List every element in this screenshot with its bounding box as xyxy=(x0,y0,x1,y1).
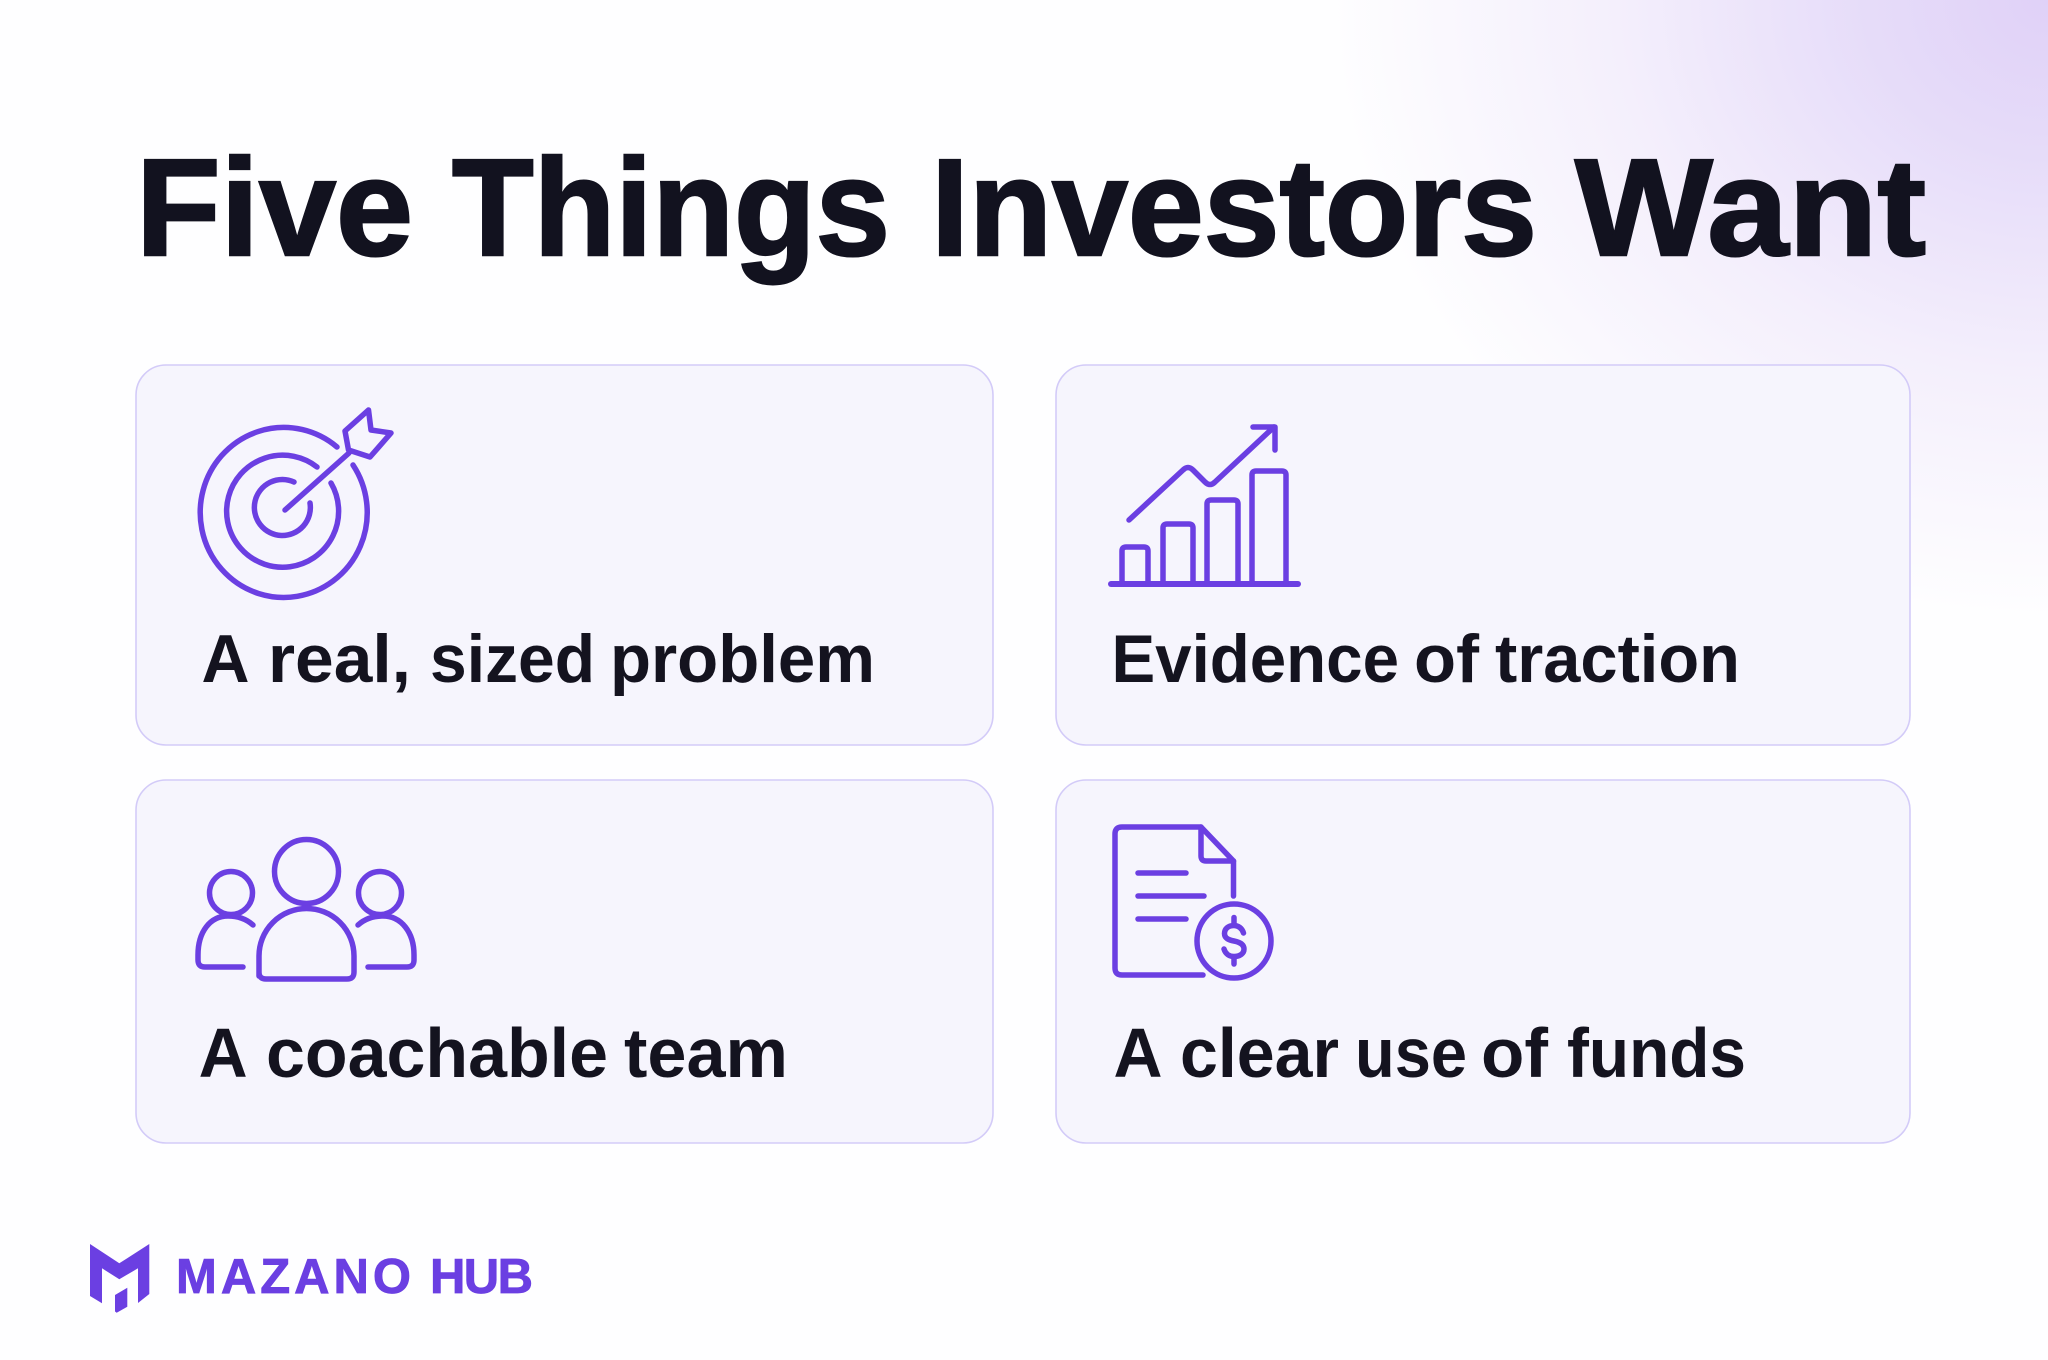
label: a coachable team xyxy=(199,1014,788,1092)
label: evidence of traction: of xyxy=(1414,621,1479,697)
icon: target with arrow xyxy=(200,410,391,597)
title: Things xyxy=(452,131,890,285)
label: a clear use of funds xyxy=(1114,1014,1746,1092)
panel: a real, sized problem xyxy=(136,365,993,745)
label: a clear use of funds: clear xyxy=(1180,1014,1339,1092)
label: a real, sized problem xyxy=(202,621,875,697)
icon: M logo mark xyxy=(90,1244,149,1313)
label: evidence of traction xyxy=(1112,621,1740,697)
label: evidence of traction: traction xyxy=(1495,621,1740,697)
panel: a coachable team xyxy=(136,780,993,1143)
label: a clear use of funds: A xyxy=(1114,1014,1162,1092)
brand name: MAZANO xyxy=(176,1250,411,1304)
title xyxy=(136,131,1926,285)
brand name: HUB xyxy=(430,1250,533,1304)
title: Want xyxy=(1575,131,1926,285)
label: a coachable team: A xyxy=(199,1014,248,1092)
title: Five xyxy=(136,131,413,285)
label: a coachable team: coachable xyxy=(266,1014,608,1092)
label: a real, sized problem: A xyxy=(202,621,250,697)
label: evidence of traction: Evidence xyxy=(1112,621,1399,697)
label: a coachable team: team xyxy=(624,1014,788,1092)
label: a clear use of funds: use xyxy=(1355,1014,1467,1092)
brand logo xyxy=(90,1244,533,1313)
title: Investors xyxy=(931,131,1537,285)
brand name xyxy=(176,1250,533,1304)
label: a clear use of funds: of xyxy=(1481,1014,1549,1092)
panel: a clear use of funds xyxy=(1056,780,1910,1143)
label: a real, sized problem: real, xyxy=(268,621,411,697)
label: a real, sized problem: sized xyxy=(430,621,595,697)
label: a clear use of funds: funds xyxy=(1567,1014,1746,1092)
label: a real, sized problem: problem xyxy=(610,621,875,697)
icon: team of three people xyxy=(198,840,414,979)
icon: document with dollar coin xyxy=(1115,827,1271,978)
panel: evidence of traction xyxy=(1056,365,1910,745)
icon: bar chart with arrow xyxy=(1111,427,1298,584)
